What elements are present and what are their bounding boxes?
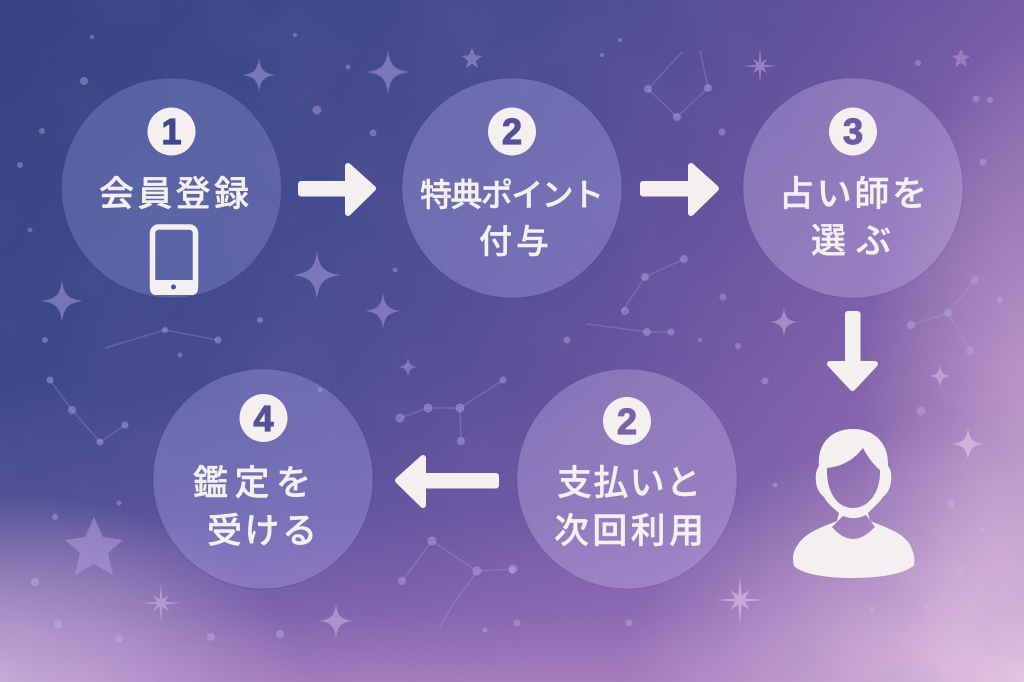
panel: step 2 bonus points	[402, 78, 622, 298]
step 2 number badge: 2	[502, 111, 522, 152]
arrow: step 1 to step 2	[299, 166, 373, 213]
panel: step 1 member registration	[62, 78, 282, 298]
step 5 number badge	[603, 397, 651, 445]
step 1 number badge	[148, 108, 196, 156]
step 2 number badge	[488, 108, 536, 156]
step 5 number badge: 2	[617, 401, 637, 442]
panel: step 4 receive reading	[153, 369, 373, 589]
step 1 label: 会員登録	[99, 175, 249, 214]
step 4 number badge	[240, 394, 288, 442]
panel: step 5 payment and next use: 次回利用	[554, 512, 704, 551]
step 4 number badge: 4	[253, 398, 274, 439]
step 1 number badge: 1	[161, 111, 182, 152]
arrow: step 3 down to advisor	[830, 312, 875, 388]
step 3 label: 占い師を	[779, 175, 927, 214]
panel: step 4 receive reading: 受ける	[207, 512, 317, 551]
step 4 label: 鑑定を	[193, 464, 311, 503]
panel: step 2 bonus points: 付与	[479, 223, 549, 260]
icon: smartphone	[150, 227, 198, 295]
step 2 label: 特典ポイント	[420, 177, 604, 213]
decorative constellations	[47, 50, 978, 628]
step 5 label: 支払いと	[557, 464, 701, 503]
step 3 number badge: 3	[843, 111, 863, 152]
step 3 number badge	[829, 108, 877, 156]
icon: advisor person	[793, 429, 914, 578]
decorative stars	[41, 48, 984, 638]
arrow: step 5 to step 4	[398, 458, 498, 505]
panel: step 3 choose fortune teller: 選ぶ	[811, 222, 891, 261]
arrow: step 2 to step 3	[641, 166, 716, 213]
panel: step 5 payment and next use	[517, 369, 737, 589]
panel: step 3 choose fortune teller	[743, 78, 963, 298]
